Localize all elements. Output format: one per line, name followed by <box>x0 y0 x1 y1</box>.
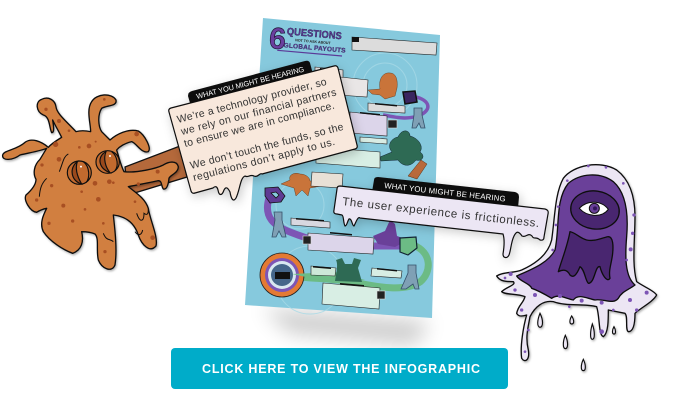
poster green stage and monster <box>292 272 365 282</box>
monster body <box>517 175 635 301</box>
callout: orange speech bubble <box>169 61 357 200</box>
poster monster: small orange lower <box>281 173 322 196</box>
poster path: green <box>292 245 428 288</box>
bubble text: to ensure we are in compliance. <box>183 100 336 150</box>
monster falling drops <box>538 313 615 371</box>
bubble text <box>176 76 345 184</box>
poster gateway ring <box>260 253 304 297</box>
button: view the infographic <box>171 348 508 389</box>
tab label: WHAT YOU MIGHT BE HEARING <box>195 65 305 101</box>
poster shadow <box>262 308 430 345</box>
bubble text: we rely on our financial partners <box>179 86 338 138</box>
poster title: 6 <box>268 22 287 56</box>
monster creases <box>39 154 148 242</box>
icon: orange monster <box>3 95 178 269</box>
bubble text: regulations don’t apply to us. <box>192 136 336 184</box>
poster gate: lower purple <box>265 187 285 203</box>
poster title: QUESTIONS <box>286 27 342 42</box>
monster spots <box>35 98 160 253</box>
poster path: top purple <box>383 96 428 118</box>
monster eyes <box>67 151 119 184</box>
callout tab <box>372 177 519 208</box>
bubble text: We’re a technology provider, so <box>176 76 328 126</box>
monster outer slime <box>497 165 657 361</box>
tab label: WHAT YOU MIGHT BE HEARING <box>384 181 506 204</box>
monster eye <box>579 202 608 215</box>
poster decorative halos <box>276 53 417 314</box>
bubble text: We don’t touch the funds, so the <box>189 121 345 172</box>
bubble body <box>334 186 548 258</box>
bubble text: The user experience is frictionless. <box>342 196 540 230</box>
poster purple monster stage <box>373 220 408 247</box>
panel: infographic poster <box>245 18 440 318</box>
bubble body <box>169 66 357 200</box>
icon: purple monster <box>497 165 657 371</box>
poster sword arm <box>408 160 427 179</box>
monster mouth <box>558 232 613 283</box>
poster monster: orange small <box>368 73 397 99</box>
button: view the infographic: CLICK HERE TO VIEW THE INFOGRAPHIC <box>202 362 480 376</box>
callout: purple speech bubble <box>334 177 548 258</box>
poster path: lower purple <box>267 198 405 246</box>
poster text cards <box>291 37 437 309</box>
poster title: GLOBAL PAYOUTS <box>283 42 346 55</box>
monster eye socket <box>568 188 622 232</box>
poster monster: green <box>380 131 423 165</box>
poster gate: green <box>400 237 417 255</box>
wooden plank held by orange monster <box>125 146 187 195</box>
callout tab <box>188 61 314 110</box>
poster card header bars <box>296 37 397 286</box>
poster title: NOT TO ASK ABOUT <box>295 38 332 45</box>
poster astronauts <box>272 108 425 289</box>
poster gate: top purple <box>403 91 417 104</box>
monster spots <box>504 165 649 353</box>
poster title <box>268 22 348 62</box>
poster number badges <box>303 120 397 299</box>
